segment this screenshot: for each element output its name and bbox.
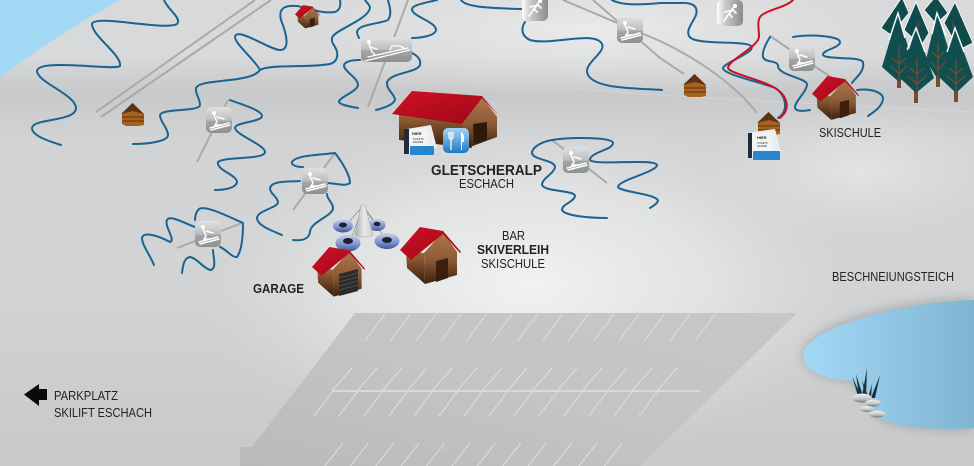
hut: left [121, 103, 144, 126]
hut: centre [683, 74, 706, 97]
label: Skilift Eschach: SKILIFT ESCHACH [54, 406, 152, 420]
label: Skischule centre: SKISCHULE [481, 257, 545, 271]
label: Bar: BAR [502, 229, 525, 243]
parking lot [240, 313, 797, 466]
icon: snowboard park 2 [717, 0, 743, 26]
icon: tickets lift station: HIER [757, 135, 767, 140]
arrow: to parking [24, 384, 47, 406]
icon: tickets Gletscheralp [404, 125, 437, 155]
icon: tickets lift station: TICKETS [757, 142, 768, 145]
house: Skischule [812, 76, 859, 120]
ski lifts [96, 0, 835, 248]
reeds and stones [852, 368, 886, 418]
icon: wide magic carpet lift [361, 37, 412, 62]
trees [881, 0, 973, 103]
icon: chair lift [617, 17, 643, 43]
icon: snowboard park 1 [522, 0, 548, 21]
icon: tickets lift station: KAUFEN [757, 145, 767, 148]
icon: skier lift 4 [563, 147, 589, 173]
icon: tickets Gletscheralp: KAUFEN [413, 141, 423, 144]
house: top small [295, 5, 320, 28]
label: Beschneiungsteich: BESCHNEIUNGSTEICH [832, 270, 954, 284]
icon: tickets Gletscheralp: TICKETS [413, 138, 424, 141]
label: Skischule: SKISCHULE [819, 126, 881, 140]
ski pistes [32, 0, 883, 273]
label: Garage: GARAGE [253, 282, 304, 296]
label: Eschach: ESCHACH [459, 177, 514, 191]
icon: skier lift 5 [789, 45, 815, 71]
icon: tickets Gletscheralp: HIER [412, 131, 422, 136]
icon: restaurant fork and knife [443, 128, 469, 153]
house: Gletscheralp restaurant [392, 91, 499, 148]
sky [0, 0, 120, 78]
house: Bar and ski rental [400, 227, 461, 284]
snow machine with rings [333, 205, 400, 252]
icon: skier lift 1 [206, 107, 232, 133]
label: Parkplatz: PARKPLATZ [54, 389, 118, 403]
icon: skier lift 2 [302, 168, 328, 194]
hut: lift station [757, 112, 780, 135]
pond [802, 298, 974, 431]
house: Garage [312, 247, 365, 297]
label: Gletscheralp: GLETSCHERALP [431, 163, 542, 179]
icon: tickets lift station [748, 129, 781, 160]
label: Skiverleih: SKIVERLEIH [477, 243, 549, 257]
icon: skier lift 3 [195, 221, 221, 247]
